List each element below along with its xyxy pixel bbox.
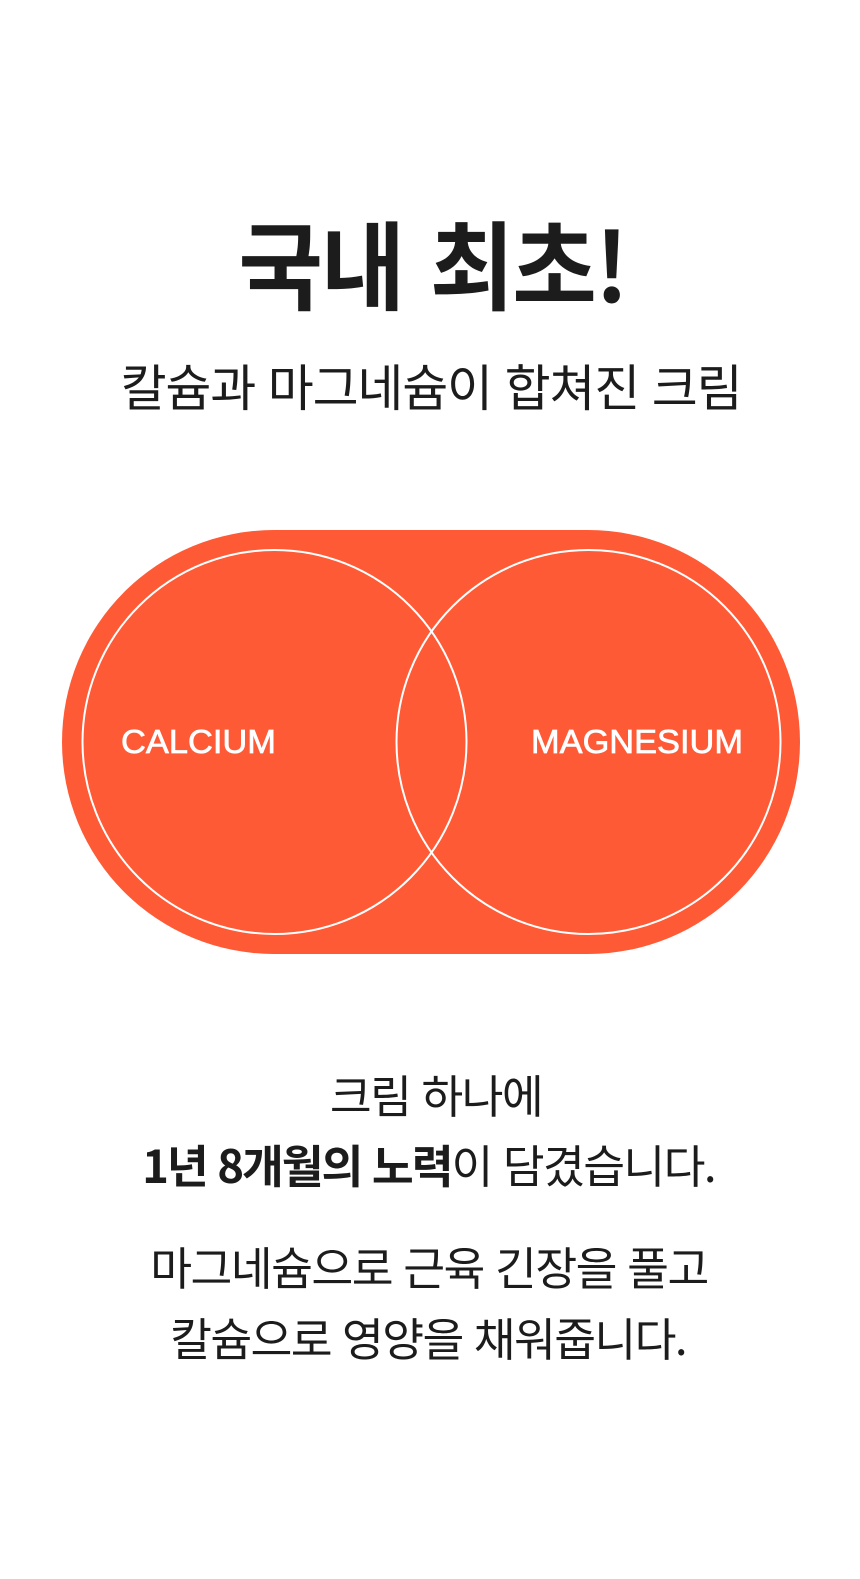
line 2: 1년 8개월의 노력이 담겼습니다. xyxy=(142,1131,715,1197)
title: 국내 최초! xyxy=(238,191,627,331)
subtitle: 칼슘과 마그네슘이 합쳐진 크림 xyxy=(121,349,741,421)
line 3: 마그네슘으로 근육 긴장을 풀고 xyxy=(150,1233,708,1299)
orange pill background xyxy=(62,530,800,954)
line 4: 칼슘으로 영양을 채워줍니다. xyxy=(170,1304,686,1370)
text block: magnesium and calcium benefits xyxy=(150,1233,708,1370)
calcium label: CALCIUM xyxy=(121,723,276,760)
magnesium label: MAGNESIUM xyxy=(531,723,743,760)
calcium circle xyxy=(82,550,466,934)
line 1: 크림 하나에 xyxy=(330,1061,542,1127)
text block: one year eight months of effort xyxy=(142,1061,715,1197)
magnesium circle xyxy=(396,550,780,934)
